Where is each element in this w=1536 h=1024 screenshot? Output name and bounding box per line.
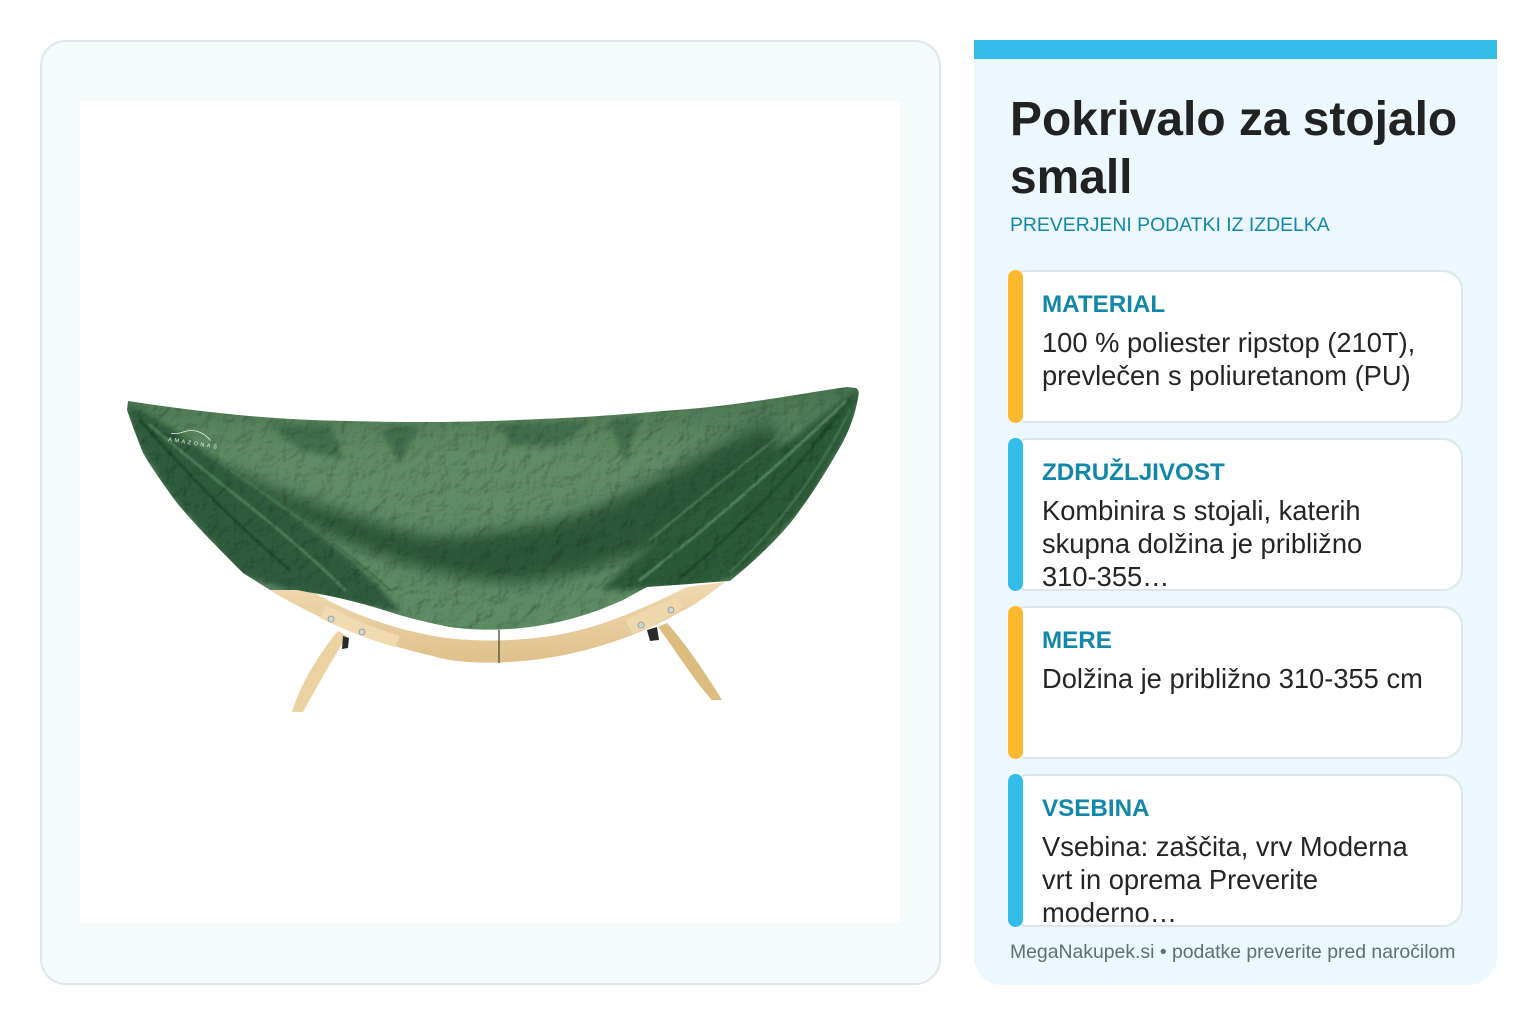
body text: 310-355… — [1042, 561, 1169, 592]
title — [1010, 93, 1457, 204]
body text: vrt in oprema Preverite — [1042, 864, 1318, 895]
right bracket — [625, 597, 683, 634]
card: dimensions — [1008, 606, 1463, 759]
title: Pokrivalo za stojalo — [1010, 93, 1457, 146]
label: VSEBINA — [1042, 795, 1150, 822]
label: MATERIAL — [1042, 291, 1165, 318]
left bracket — [320, 605, 400, 647]
body text: Vsebina: zaščita, vrv Moderna — [1042, 831, 1408, 862]
drape fold highlights — [140, 400, 850, 590]
label: ZDRUŽLJIVOST — [1042, 459, 1225, 486]
body text: moderno… — [1042, 897, 1177, 928]
body text: prevlečen s poliuretanom (PU) — [1042, 360, 1411, 391]
right leg — [658, 623, 722, 700]
title: small — [1010, 151, 1132, 204]
body text: skupna dolžina je približno — [1042, 528, 1362, 559]
accent bar: yellow — [1008, 606, 1023, 759]
brand logo on cover — [168, 427, 221, 451]
accent bar: yellow — [1008, 270, 1023, 423]
label: MERE — [1042, 627, 1112, 654]
right side drape — [600, 388, 858, 590]
accent bar: blue — [1008, 438, 1023, 591]
left leg — [292, 631, 347, 712]
left side drape — [127, 404, 400, 612]
green protective cover — [120, 380, 865, 635]
body text — [1042, 495, 1362, 592]
dark belly shadow band — [205, 420, 790, 583]
accent bar: blue — [1008, 774, 1023, 927]
upper crease patches — [270, 418, 640, 465]
panel: product info — [974, 40, 1497, 985]
body text: 100 % poliester ripstop (210T), — [1042, 327, 1415, 358]
footer note: MegaNakupek.si • podatke preverite pred naročilom — [1010, 941, 1455, 963]
body text — [1042, 327, 1415, 391]
body text: Dolžina je približno 310-355 cm — [1042, 663, 1423, 694]
centre seam — [498, 630, 500, 663]
product photo area — [80, 102, 900, 922]
top accent bar — [974, 40, 1497, 59]
rubber stubs — [342, 636, 349, 649]
stand: wooden frame — [270, 582, 725, 712]
card: contents — [1008, 774, 1463, 927]
bolts — [328, 607, 674, 635]
subtitle: PREVERJENI PODATKI IZ IZDELKA — [1010, 214, 1330, 236]
card: material — [1008, 270, 1463, 423]
card: compatibility — [1008, 438, 1463, 591]
body text — [1042, 831, 1408, 928]
brand logo on cover: AMAZONAS — [168, 437, 220, 451]
panel: product image frame — [40, 40, 941, 985]
curved beam — [270, 582, 725, 663]
body text: Kombinira s stojali, katerih — [1042, 495, 1361, 526]
